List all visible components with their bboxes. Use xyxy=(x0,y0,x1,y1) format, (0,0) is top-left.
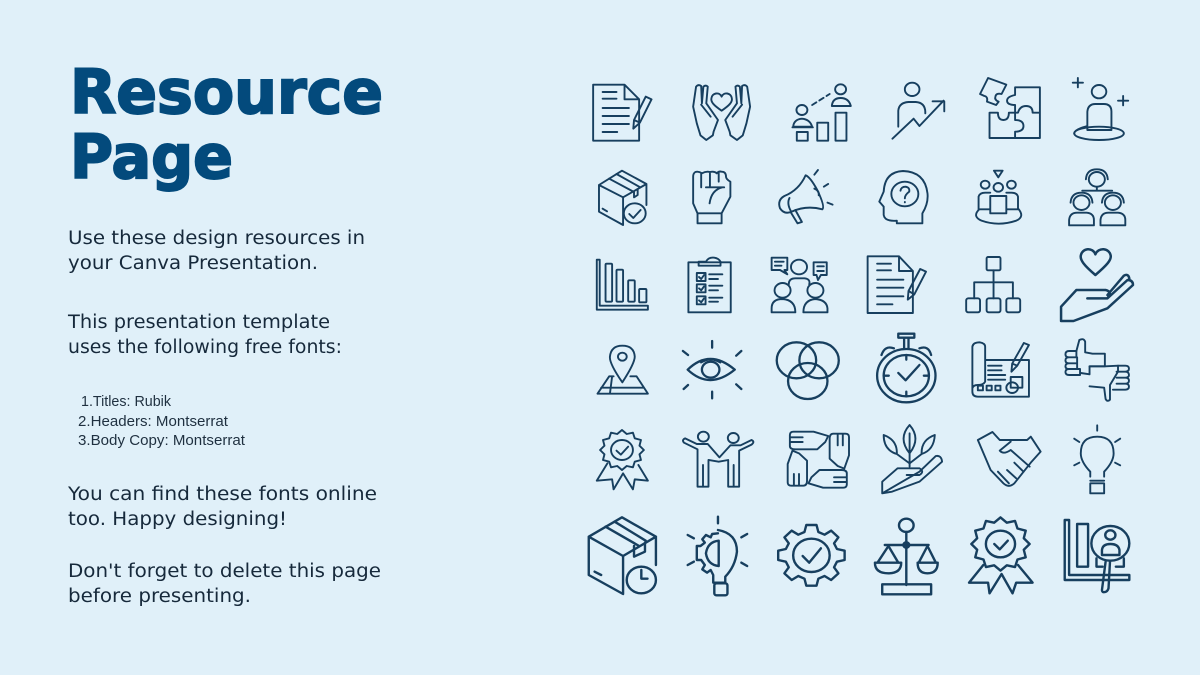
icon rows 3 and 4 xyxy=(597,249,1133,402)
icon: map pin xyxy=(598,346,648,394)
icon: box with check xyxy=(599,171,646,225)
icon: plant in hand xyxy=(882,425,942,493)
icon: descending bar chart xyxy=(597,260,648,310)
icon: org chart xyxy=(966,257,1020,312)
icon rows 5 and 6 xyxy=(589,425,1129,595)
text block: fonts intro xyxy=(67,312,342,358)
icon: document with pencil xyxy=(868,256,926,313)
icon: people in discussion xyxy=(772,258,827,312)
text block: fonts intro: uses the following free fonts: xyxy=(68,337,342,358)
text block: fonts intro: This presentation template xyxy=(67,312,330,333)
text block: find fonts xyxy=(67,484,377,530)
icon: eye with rays xyxy=(683,341,741,398)
icon: gear lightbulb xyxy=(688,517,747,595)
text block: reminder: Don't forget to delete this page xyxy=(68,561,381,582)
text block: find fonts: too. Happy designing! xyxy=(68,509,287,530)
icon: raised fist xyxy=(693,172,730,223)
list: fonts xyxy=(78,394,245,449)
list: fonts: 1.Titles: Rubik xyxy=(81,394,172,410)
icon: gear with check xyxy=(778,525,845,586)
text block: intro xyxy=(68,228,365,274)
icon: large award ribbon xyxy=(969,517,1033,593)
icon: person on platform with plus signs xyxy=(1073,78,1128,140)
panel: left text column xyxy=(67,57,383,607)
icon: person with rising arrow xyxy=(892,83,944,139)
icon: hands holding heart xyxy=(693,85,750,140)
panel: icon grid xyxy=(589,78,1133,595)
icon: growth people and bars xyxy=(792,84,851,141)
icon: clipboard checklist xyxy=(688,258,731,312)
icon: stopwatch xyxy=(877,334,936,402)
icon rows 1 and 2 xyxy=(593,78,1128,225)
icon: megaphone xyxy=(779,170,833,223)
icon: chart with magnifier and person xyxy=(1065,520,1129,592)
icon: two people together xyxy=(683,432,753,487)
title: Page xyxy=(70,122,233,193)
icon: venn diagram xyxy=(777,342,839,399)
list: fonts: 2.Headers: Montserrat xyxy=(78,414,228,430)
title xyxy=(70,57,383,193)
icon: balance scales xyxy=(875,519,938,594)
icon: hand with heart xyxy=(1061,249,1133,321)
icon: lightbulb xyxy=(1074,425,1120,493)
icon: handshake xyxy=(978,432,1041,486)
text block: reminder xyxy=(68,561,381,607)
icon: award ribbon xyxy=(597,430,648,489)
icon: audience group xyxy=(976,171,1021,224)
icon: blueprint with pencil xyxy=(972,342,1029,397)
icon: four hands teamwork xyxy=(788,432,849,488)
icon: support team with headsets xyxy=(1069,169,1125,225)
icon: head with question mark xyxy=(879,171,928,223)
icon: puzzle xyxy=(980,78,1040,138)
text block: intro: your Canva Presentation. xyxy=(68,253,318,274)
title: Resource xyxy=(70,57,383,128)
icon: document with pencil xyxy=(593,85,652,141)
icon: thumbs up and down xyxy=(1065,339,1129,401)
text block: intro: Use these design resources in xyxy=(68,228,365,249)
icon: box with clock xyxy=(589,517,656,594)
text block: find fonts: You can find these fonts online xyxy=(67,484,377,505)
list: fonts: 3.Body Copy: Montserrat xyxy=(78,433,245,449)
text block: reminder: before presenting. xyxy=(68,586,251,607)
